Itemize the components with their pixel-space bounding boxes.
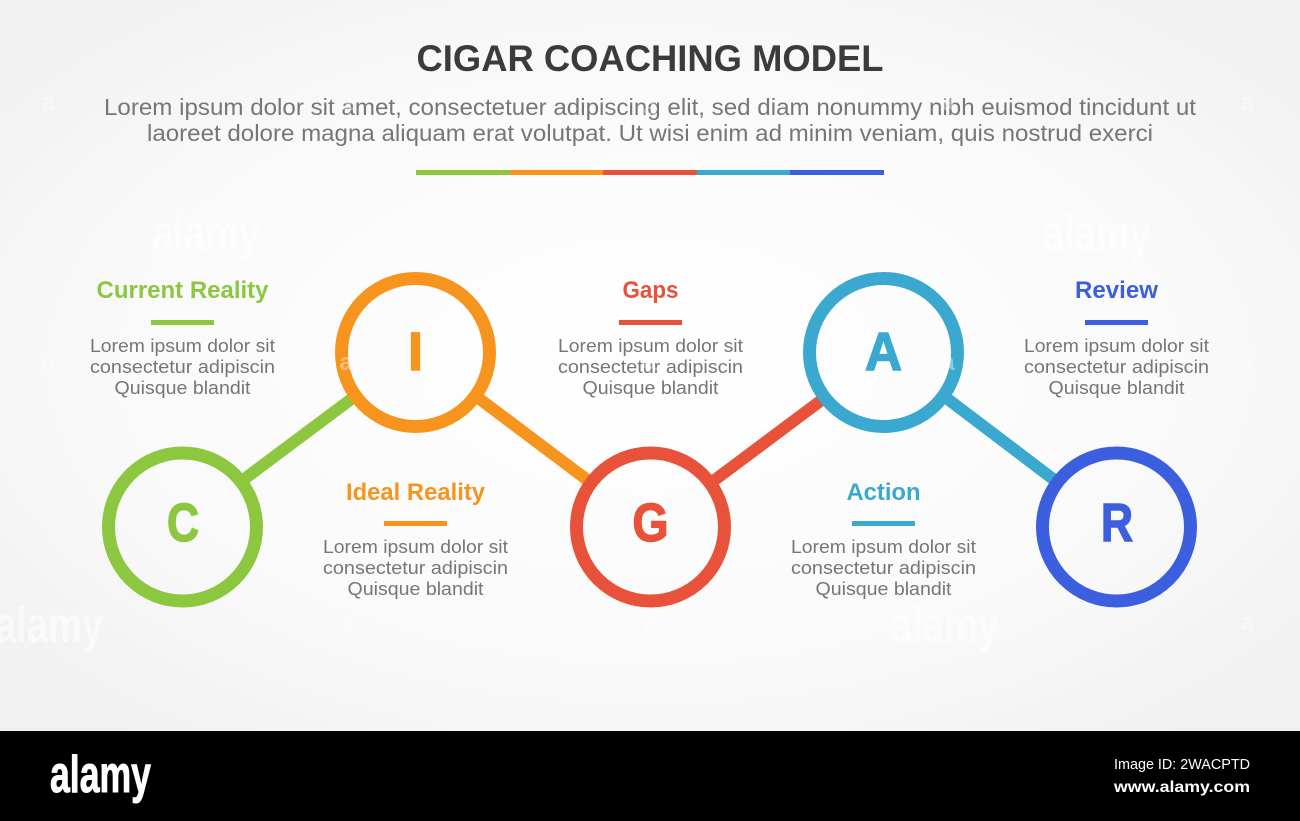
block: Action: consectetur adipiscin [791, 558, 976, 578]
watermarks [0, 205, 1151, 653]
small watermark marks: a [1240, 89, 1254, 116]
small watermark marks: a [41, 349, 55, 376]
node: I: I [408, 322, 423, 382]
small watermark marks: a [339, 89, 353, 116]
small watermark marks: a [339, 349, 353, 376]
block: Gaps: Lorem ipsum dolor sit [558, 336, 743, 356]
watermarks: alamy [152, 205, 260, 261]
small watermark marks: a [941, 349, 955, 376]
connector: A to R [945, 397, 1057, 482]
watermarks: alamy [1043, 205, 1151, 261]
block: Review [1024, 277, 1209, 398]
small watermark marks: a [341, 609, 355, 636]
block: Gaps: Gaps [622, 277, 678, 304]
connector: C to I [243, 397, 354, 480]
block: Review: Review [1075, 277, 1158, 304]
footer bar [0, 731, 1300, 821]
watermarks: alamy [891, 597, 999, 653]
block: Review: Quisque blandit [1048, 378, 1184, 398]
node: I [342, 278, 490, 426]
block: Action: Action [846, 479, 920, 506]
small watermark marks: a [1240, 609, 1254, 636]
block: Current Reality: Current Reality [96, 277, 269, 304]
node: C: C [167, 493, 199, 553]
multicolour divider [416, 170, 884, 175]
subtitle text block: Lorem ipsum dolor sit amet, consectetuer adipiscing elit, sed diam nonummy nibh euismod tincidunt ut [104, 94, 1197, 120]
block: Action: Quisque blandit [816, 579, 952, 599]
node: R: R [1101, 493, 1133, 553]
small watermark marks: a [941, 89, 955, 116]
footer url: www.alamy.com [1113, 779, 1250, 796]
small watermark marks: a [643, 349, 657, 376]
block: Current Reality: consectetur adipiscin [90, 357, 275, 377]
block: Current Reality: Quisque blandit [114, 378, 250, 398]
small watermark marks: a [41, 89, 55, 116]
footer logo: alamy [50, 746, 151, 804]
node: R [1042, 453, 1190, 601]
block: Gaps: consectetur adipiscin [558, 357, 743, 377]
title: CIGAR COACHING MODEL [416, 38, 884, 79]
connector: G to A [712, 399, 823, 482]
small watermark marks: a [643, 609, 657, 636]
block: Ideal Reality: Lorem ipsum dolor sit [323, 537, 508, 557]
block: Ideal Reality: Quisque blandit [348, 579, 484, 599]
block: Review: Lorem ipsum dolor sit [1024, 336, 1209, 356]
block: Current Reality [90, 277, 275, 398]
block: Action [791, 479, 976, 599]
block: Ideal Reality [323, 479, 508, 599]
node: A [810, 278, 958, 426]
block: Gaps: Quisque blandit [582, 378, 718, 398]
small watermark marks [41, 89, 1254, 636]
node: G [576, 453, 724, 601]
block: Ideal Reality: consectetur adipiscin [323, 558, 508, 578]
connector: I to G [477, 397, 590, 482]
block: Gaps [558, 277, 743, 398]
node: C [108, 453, 256, 601]
small watermark marks: a [1240, 349, 1254, 376]
node: A: A [865, 322, 902, 382]
footer image id: Image ID: 2WACPTD [1114, 756, 1250, 773]
block: Current Reality: Lorem ipsum dolor sit [90, 336, 275, 356]
block: Action: Lorem ipsum dolor sit [791, 537, 976, 557]
small watermark marks: a [643, 94, 657, 121]
node: G: G [632, 493, 668, 553]
block: Ideal Reality: Ideal Reality [346, 479, 486, 506]
subtitle text block: laoreet dolore magna aliquam erat volutpat. Ut wisi enim ad minim veniam, quis nostrud exerci [147, 120, 1153, 146]
block: Review: consectetur adipiscin [1024, 357, 1209, 377]
subtitle text block [104, 94, 1197, 146]
